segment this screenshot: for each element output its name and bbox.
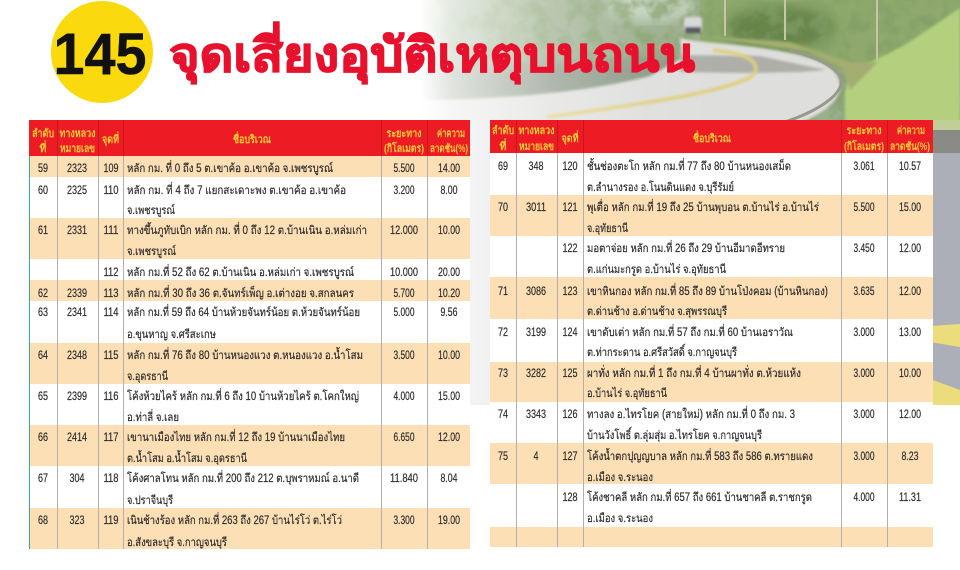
row 70: 15.00 bbox=[899, 202, 921, 214]
row 75: 75 bbox=[498, 451, 508, 463]
row 63: หลัก กม.ที่ 59 ถึง 64 บ้านห้วยจันทร์น้อย ต.ห้วยจันทร์น้อย bbox=[127, 304, 360, 319]
left column rules bbox=[30, 156, 428, 549]
row 71: เขาหินกอง หลัก กม.ที่ 85 ถึง 89 บ้านโป่งคอม (บ้านหินกอง) bbox=[587, 283, 828, 298]
title badge: 145 bbox=[51, 1, 153, 103]
panel: left table bbox=[29, 120, 470, 549]
row 72: 124 bbox=[562, 327, 578, 339]
row 68: 323 bbox=[70, 515, 84, 527]
verge foliage bbox=[718, 37, 878, 90]
row 122: 12.00 bbox=[899, 243, 921, 255]
row 66 bbox=[38, 429, 460, 465]
row 73: ผาทั่ง หลัก กม.ที่ 1 ถึง กม.ที่ 4 บ้านผาทั่ง ต.ห้วยแห้ง bbox=[587, 365, 801, 380]
row 68: 68 bbox=[38, 515, 48, 527]
icon: car bbox=[684, 17, 702, 33]
row 68: 119 bbox=[104, 515, 118, 527]
row 72: 13.00 bbox=[899, 327, 921, 339]
row 75: 8.23 bbox=[902, 451, 918, 463]
panel: right table bbox=[490, 120, 933, 547]
row 65: 116 bbox=[104, 391, 118, 403]
row 62: 5.700 bbox=[394, 288, 414, 300]
row 73: อ.บ้านไร่ จ.อุทัยธานี bbox=[587, 387, 667, 400]
row 59: 2323 bbox=[67, 163, 87, 175]
row 65: 65 bbox=[38, 391, 48, 403]
left table header: ที่ bbox=[40, 140, 46, 155]
row 72: 3199 bbox=[526, 327, 546, 339]
row 71: 3086 bbox=[526, 286, 546, 298]
row 69: 348 bbox=[528, 161, 544, 173]
right table header: (กิโลเมตร) bbox=[844, 139, 884, 153]
road centre line bbox=[547, 50, 756, 117]
row 63 bbox=[38, 304, 458, 341]
row 61: 12.000 bbox=[390, 225, 418, 237]
row 75: โค้งน้ำตกปุญญบาล หลัก กม.ที่ 583 ถึง 586 ต.ทรายแดง bbox=[587, 448, 813, 463]
right table header: ลำดับ bbox=[492, 124, 514, 137]
row 71: ต.ด่านช้าง อ.ด่านช้าง จ.สุพรรณบุรี bbox=[587, 305, 727, 318]
row 64: 3.500 bbox=[394, 350, 414, 362]
row 63: 114 bbox=[104, 307, 119, 319]
row 72: ต.ท่ากระดาน อ.ศรีสวัสดิ์ จ.กาญจนบุรี bbox=[587, 343, 737, 359]
row 69 bbox=[498, 158, 921, 194]
row 67: โค้งศาลโทน หลัก กม.ที่ 200 ถึง 212 ต.บุพราหมณ์ อ.นาดี bbox=[127, 470, 359, 485]
row 73: 10.00 bbox=[899, 368, 921, 380]
row 66: เขานาเมืองไทย หลัก กม.ที่ 12 ถึง 19 บ้านนาเมืองไทย bbox=[127, 429, 345, 444]
row 68: 19.00 bbox=[438, 515, 460, 527]
row 65: อ.ท่าลี่ จ.เลย bbox=[127, 409, 179, 424]
left table header: จุดที่ bbox=[102, 131, 119, 147]
row 73: 73 bbox=[498, 368, 508, 380]
left table header: ชื่อบริเวณ bbox=[233, 131, 272, 146]
row 61: 2331 bbox=[67, 225, 87, 237]
row 128: 11.31 bbox=[899, 492, 921, 504]
row 69: ชั้นช่องตะโก หลัก กม.ที่ 77 ถึง 80 บ้านหนองเสม็ด bbox=[587, 158, 791, 173]
row 74 bbox=[498, 406, 921, 442]
row 67: 8.04 bbox=[440, 473, 458, 485]
row 61 bbox=[38, 222, 460, 258]
row 122: 122 bbox=[562, 243, 578, 255]
row 73: 125 bbox=[562, 368, 578, 380]
left table header bbox=[29, 120, 470, 156]
row 62: 2339 bbox=[67, 288, 87, 300]
row 72: 3.000 bbox=[854, 327, 874, 339]
row 59: หลัก กม. ที่ 0 ถึง 5 ต.เขาค้อ อ.เขาค้อ จ.เพชรบูรณ์ bbox=[127, 160, 333, 175]
row 69: 69 bbox=[498, 161, 508, 173]
left table header: (กิโลเมตร) bbox=[384, 141, 424, 155]
row 61: 111 bbox=[104, 225, 118, 237]
gutter fade bbox=[470, 120, 490, 405]
right strip road bbox=[930, 152, 960, 405]
row 60: 110 bbox=[104, 185, 118, 197]
row 64: หลัก กม.ที่ 76 ถึง 80 บ้านหนองแวง ต.หนองแวง อ.น้ำโสม bbox=[127, 347, 363, 362]
row 60: จ.เพชรบูรณ์ bbox=[127, 203, 175, 217]
left table header: หมายเลข bbox=[60, 143, 95, 155]
row 70: 121 bbox=[562, 202, 578, 214]
background photo: mountain road bbox=[420, 0, 960, 405]
row 112: 10.000 bbox=[390, 267, 418, 279]
row 72: เขาดับเต่า หลัก กม.ที่ 57 ถึง กม.ที่ 60 บ้านเอราวัณ bbox=[587, 324, 793, 339]
row 75: 3.000 bbox=[854, 451, 874, 463]
row 75: อ.เมือง จ.ระนอง bbox=[587, 471, 653, 484]
row 64 bbox=[38, 347, 460, 383]
row 73: 3.000 bbox=[854, 368, 874, 380]
left table header: ค่าความ bbox=[437, 128, 465, 140]
right column rules bbox=[516, 153, 888, 547]
row 73 bbox=[498, 365, 921, 400]
row 59: 59 bbox=[38, 163, 48, 175]
row 62 bbox=[38, 285, 460, 300]
forest bbox=[420, 0, 960, 125]
row 74: 126 bbox=[562, 409, 578, 421]
row 75 bbox=[498, 448, 918, 484]
row 72 bbox=[498, 324, 921, 359]
row 60: 3.200 bbox=[394, 185, 414, 197]
right table header bbox=[490, 120, 933, 153]
row 62: 10.20 bbox=[438, 288, 460, 300]
left table header: ทางหลวง bbox=[60, 128, 96, 140]
row 128 bbox=[562, 489, 921, 525]
row 70 bbox=[498, 199, 921, 235]
row 128: 128 bbox=[562, 492, 578, 504]
row 63: 2341 bbox=[67, 307, 87, 319]
row 69: 120 bbox=[562, 161, 578, 173]
row 70: พุเตื่อ หลัก กม.ที่ 19 ถึง 25 บ้านพุบอน ต.บ้านไร่ อ.บ้านไร่ bbox=[587, 199, 819, 214]
row 70: 3011 bbox=[526, 202, 546, 214]
row 73: 3282 bbox=[526, 368, 546, 380]
row 59: 14.00 bbox=[438, 163, 460, 175]
right table header: ทางหลวง bbox=[518, 125, 554, 137]
row 63: 5.000 bbox=[394, 307, 414, 319]
row 74: 12.00 bbox=[899, 409, 921, 421]
row 68: เนินช้างร้อง หลัก กม.ที่ 263 ถึง 267 บ้านไร่โว่ ต.ไร่โว่ bbox=[127, 512, 342, 527]
title badge: 145: 145 bbox=[54, 22, 146, 87]
row 67 bbox=[38, 470, 458, 507]
left table header: ระยะทาง bbox=[386, 128, 422, 140]
row 65: โค้งห้วยไคร้ หลัก กม.ที่ 6 ถึง 10 บ้านห้วยไคร้ ต.โคกใหญ่ bbox=[127, 388, 359, 403]
row 64: 2348 bbox=[67, 350, 87, 362]
row 61: ทางขึ้นภูทับเบิก หลัก กม. ที่ 0 ถึง 12 ต.บ้านเนิน อ.หล่มเก่า bbox=[127, 222, 367, 237]
road surface bbox=[420, 38, 840, 125]
row 112 bbox=[104, 264, 460, 279]
row 128: 4.000 bbox=[854, 492, 874, 504]
row 70: 70 bbox=[498, 202, 508, 214]
row 67: 304 bbox=[70, 473, 85, 485]
row 66: ต.น้ำโสม อ.น้ำโสม จ.อุดรธานี bbox=[127, 450, 247, 465]
row 66: 117 bbox=[104, 432, 118, 444]
row 67: 11.840 bbox=[390, 473, 418, 485]
row 60: 60 bbox=[38, 185, 48, 197]
title: จุดเสี่ยงอุบัติเหตุบนถนน bbox=[169, 21, 695, 84]
right table header: ที่ bbox=[500, 138, 506, 153]
row 74: 3343 bbox=[526, 409, 546, 421]
row 68 bbox=[38, 512, 460, 549]
row 69: 3.061 bbox=[854, 161, 874, 173]
row 67: 118 bbox=[104, 473, 118, 485]
left table header: ลาดชัน(%) bbox=[430, 142, 468, 155]
row 62: 113 bbox=[104, 288, 118, 300]
row 65: 15.00 bbox=[438, 391, 460, 403]
right table header: ชื่อบริเวณ bbox=[693, 130, 732, 145]
row 68: 3.300 bbox=[394, 515, 414, 527]
forest shadow band bbox=[472, 56, 676, 95]
row 71 bbox=[498, 283, 921, 318]
row 61: 61 bbox=[38, 225, 48, 237]
row 65: 2399 bbox=[67, 391, 87, 403]
right row stripes bbox=[490, 195, 933, 547]
row 64: จ.อุดรธานี bbox=[127, 370, 168, 383]
row 122: มอตาจ่อย หลัก กม.ที่ 26 ถึง 29 บ้านอีมาดอีทราย bbox=[587, 240, 785, 255]
row 72: 72 bbox=[498, 327, 508, 339]
row 112: หลัก กม.ที่ 52 ถึง 62 ต.บ้านเนิน อ.หล่มเก่า จ.เพชรบูรณ์ bbox=[127, 264, 354, 279]
row 66: 66 bbox=[38, 432, 48, 444]
row 74: บ้านวังโพธิ์ ต.ลุ่มสุ่ม อ.ไทรโยค จ.กาญจนบุรี bbox=[587, 426, 762, 442]
row 122: ต.แก่นมะกรูด อ.บ้านไร่ จ.อุทัยธานี bbox=[587, 263, 726, 276]
row 64: 10.00 bbox=[438, 350, 460, 362]
row 63: 63 bbox=[38, 307, 48, 319]
row 67: 67 bbox=[38, 473, 48, 485]
row 60: 2325 bbox=[67, 185, 87, 197]
row 74: ทางลง อ.ไทรโยค (สายใหม่) หลัก กม.ที่ 0 ถึง กม. 3 bbox=[587, 406, 795, 421]
right table header: จุดที่ bbox=[562, 130, 578, 146]
row 66: 12.00 bbox=[438, 432, 460, 444]
row 71: 3.635 bbox=[854, 286, 874, 298]
row 60 bbox=[38, 182, 458, 217]
row 69: ต.ลำนางรอง อ.โนนดินแดง จ.บุรีรัมย์ bbox=[587, 180, 734, 194]
row 59 bbox=[38, 160, 460, 175]
right table header: ลาดชัน(%) bbox=[890, 140, 930, 153]
row 61: 10.00 bbox=[438, 225, 460, 237]
row 67: จ.ปราจีนบุรี bbox=[127, 494, 173, 507]
row 59: 109 bbox=[104, 163, 118, 175]
road edge kerb bbox=[785, 50, 841, 122]
row 128: โค้งชาคลี หลัก กม.ที่ 657 ถึง 661 บ้านชาคลี ต.ราชกรูด bbox=[587, 489, 812, 504]
row 122 bbox=[562, 240, 921, 276]
row 59: 5.500 bbox=[394, 163, 414, 175]
row 63: อ.ขุนหาญ จ.ศรีสะเกษ bbox=[127, 328, 216, 341]
row 71: 71 bbox=[498, 286, 508, 298]
row 60: หลัก กม. ที่ 4 ถึง 7 แยกสะเดาะพง ต.เขาค้อ อ.เขาค้อ bbox=[127, 182, 346, 197]
road shadow bbox=[680, 55, 826, 73]
row 74: 74 bbox=[498, 409, 508, 421]
row 66: 6.650 bbox=[394, 432, 414, 444]
row 69: 10.57 bbox=[899, 161, 921, 173]
green hillside bbox=[845, 8, 960, 125]
row 75: 4 bbox=[534, 451, 539, 463]
row 64: 115 bbox=[104, 350, 118, 362]
row 64: 64 bbox=[38, 350, 48, 362]
row 65: 4.000 bbox=[394, 391, 414, 403]
row 128: อ.เมือง จ.ระนอง bbox=[587, 512, 653, 525]
right table header: ระยะทาง bbox=[846, 125, 882, 137]
right table header: หมายเลข bbox=[519, 141, 554, 153]
row 122: 3.450 bbox=[854, 243, 874, 255]
row 71: 123 bbox=[562, 286, 578, 298]
row 61: จ.เพชรบูรณ์ bbox=[127, 244, 176, 258]
row 71: 12.00 bbox=[899, 286, 921, 298]
left row stripes bbox=[29, 156, 470, 549]
row 75: 127 bbox=[562, 451, 578, 463]
row 112: 112 bbox=[104, 267, 118, 279]
row 66: 2414 bbox=[67, 432, 87, 444]
row 112: 20.00 bbox=[438, 267, 460, 279]
row 63: 9.56 bbox=[440, 307, 458, 319]
row 62: 62 bbox=[38, 288, 48, 300]
row 70: 5.500 bbox=[854, 202, 874, 214]
right table header: ค่าความ bbox=[897, 125, 925, 137]
row 74: 3.000 bbox=[854, 409, 874, 421]
left table header: ลำดับ bbox=[32, 127, 54, 140]
row 65 bbox=[38, 388, 460, 424]
row 70: จ.อุทัยธานี bbox=[587, 222, 628, 235]
row 60: 8.00 bbox=[440, 185, 458, 197]
row 68: อ.สังขละบุรี จ.กาญจนบุรี bbox=[127, 536, 227, 549]
row 62: หลัก กม.ที่ 30 ถึง 36 ต.จันทร์เพ็ญ อ.เต่างอย จ.สกลนคร bbox=[127, 285, 354, 300]
